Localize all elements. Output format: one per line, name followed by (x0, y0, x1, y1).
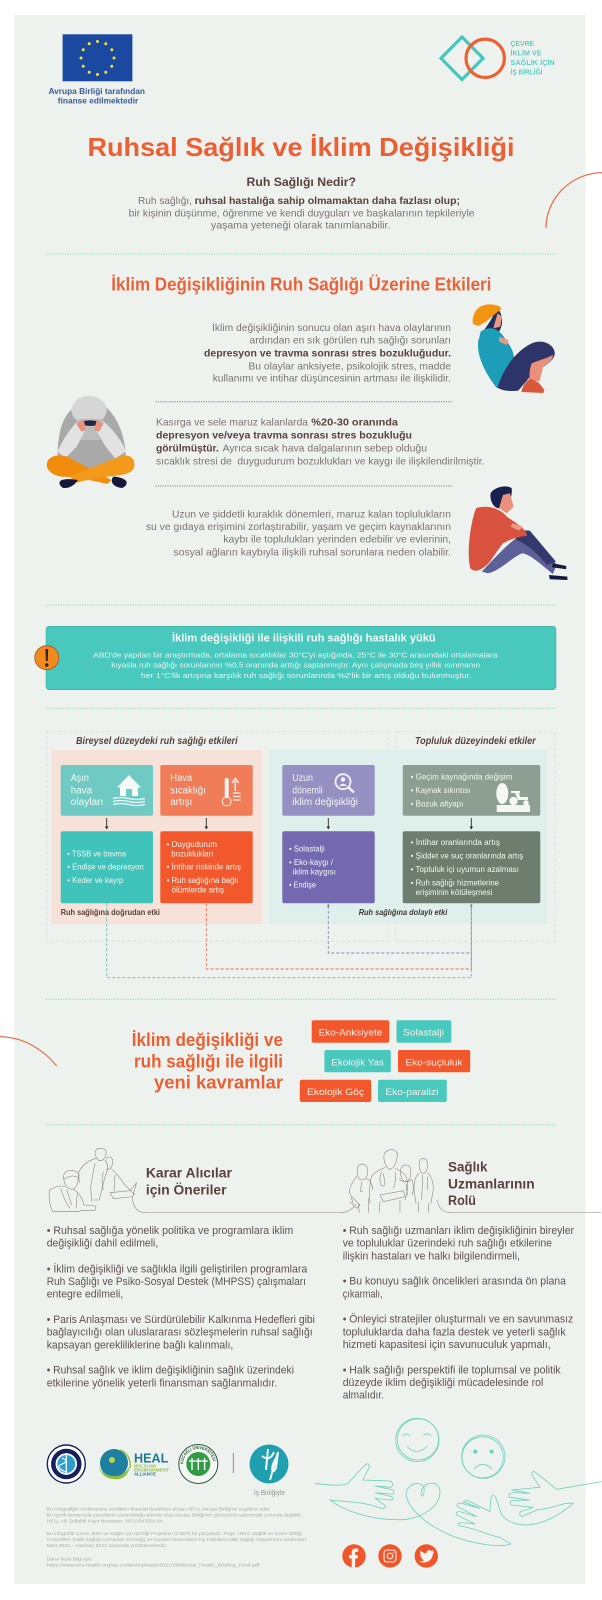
box: rising temperature: Hava (170, 773, 193, 784)
arc: top right decoration (546, 173, 602, 228)
logo: European Union flag with caption: finanse edilmektedir (58, 96, 139, 106)
text block: footer notes: HASUDER (Halk Sağlığı Uzmanları Derneği) ve Kocaeli Üniversitesi Tıp Fakültesi Halk Sağlığı Departmanı tarafından (47, 1536, 306, 1542)
icon: thermometer (222, 778, 241, 806)
text block: recommendations for decision makers: • Ruhsal sağlığa yönelik politika ve programlara iklim (47, 1225, 293, 1237)
icon: flooded house (113, 775, 145, 806)
text block: extreme weather: İklim değişikliğinin sonucu olan aşırı hava olaylarının (212, 321, 451, 334)
text block: extreme weather: depresyon ve travma sonrası stres bozukluğudur. (204, 347, 451, 359)
right hand line (502, 1471, 602, 1525)
heading: new concepts (132, 1030, 283, 1093)
text block: extreme weather: Bu olaylar anksiyete, psikolojik stres, madde (248, 360, 451, 372)
box: community outcomes: • Ruh sağlığı hizmetlerine (411, 878, 499, 887)
heading: new concepts: İklim değişikliği ve (132, 1030, 283, 1050)
text block: role of health professionals: • Bu konuyu sağlık öncelikleri arasında ön plana (343, 1276, 566, 1288)
arrows: dashed connectors (107, 903, 473, 978)
arc: left decoration (0, 1037, 57, 1066)
box: long-term outcomes: iklim kaygısı (293, 867, 336, 876)
box: long-term outcomes: • Endişe (289, 881, 316, 890)
callout: disease burden: İklim değişikliği ile ilişkili ruh sağlığı hastalık yükü (172, 632, 436, 645)
text block: footer notes: Bu infografiğin üretilmesine verdikleri finansal destekten dolayı HEAL Avrupa Birliği'ne teşekkür eder. (47, 1506, 271, 1511)
text block: droughts: sosyal ağların kaybıyla ilişkili ruhsal sorunlara neden olabilir. (174, 546, 451, 558)
heading: decision makers (146, 1165, 233, 1198)
heading: new concepts: yeni kavramlar (154, 1073, 283, 1093)
chart: health effects flow diagram: Ruh sağlığına dolaylı etki (359, 908, 448, 917)
callout: disease burden: her 1°C'lik artışına karşılık ruh sağlığı sorunlarında %2'lik bir artış olduğu bulunmuştur. (141, 671, 471, 680)
title: Ruhsal Sağlık ve İklim Değişikliği (88, 132, 514, 162)
box: community drivers: • Bozuk altyapı (411, 799, 463, 808)
text block: recommendations for decision makers: kapsayan gerekliliklerine bağlı kalınmalı, (47, 1339, 233, 1351)
logo: European Union flag with caption (48, 34, 145, 105)
box: community outcomes: • Şiddet ve suç oranlarında artış (411, 852, 523, 861)
heading: decision makers: Karar Alıcılar (146, 1165, 233, 1180)
logo: Çevre İklim ve Sağlık için İş Birliği: İKLİM VE (510, 48, 542, 57)
logo: Çevre İklim ve Sağlık için İş Birliği: ÇEVRE (510, 39, 534, 48)
logo: teal medical emblem (250, 1444, 288, 1497)
icons: social media (342, 1544, 438, 1568)
box: long-term outcomes: • Eko-kaygı / (289, 858, 334, 867)
text block: role of health professionals (343, 1225, 574, 1402)
box: extreme weather outcomes: • Keder ve kayıp (67, 876, 124, 885)
text block: footer notes (47, 1506, 306, 1568)
box: long-term climate change (282, 765, 375, 816)
frame line under headings (145, 1200, 601, 1213)
heading: effects on mental health: İklim Değişikliğinin Ruh Sağlığı Üzerine Etkileri (111, 275, 491, 295)
logo: Halk Sağlığı Uzmanları Derneği (47, 1445, 85, 1483)
text block: Ruh Sağlığı Nedir (129, 175, 475, 232)
callout: disease burden (35, 626, 556, 690)
text block: recommendations for decision makers: entegre edilmeli, (47, 1289, 123, 1301)
text block: hurricanes and floods: depresyon ve/veya travma sonrası stres bozukluğu (156, 430, 412, 442)
chart: health effects flow diagram: Ruh sağlığına doğrudan etki (61, 908, 160, 917)
box: extreme weather: hava (71, 785, 93, 796)
text block: extreme weather: ardından en sık görülen ruh sağlığı sorunları (250, 335, 451, 347)
text block: droughts: kaybı ile toplulukları yerinden edebilir ve evlerinin, (223, 534, 451, 546)
box: community outcomes (403, 831, 540, 903)
box: extreme weather (61, 765, 153, 816)
illustration: health professionals line drawing (349, 1150, 433, 1213)
box: rising temperature: artışı (170, 797, 192, 808)
arrows: downward links (105, 818, 473, 830)
icon: sitting person in red hoodie (469, 486, 567, 580)
text block: hurricanes and floods: %20-30 oranında (311, 417, 398, 429)
heading: health professionals: Rolü (448, 1193, 476, 1208)
box: rising temperature (160, 765, 253, 816)
text block: recommendations for decision makers: • Ruhsal sağlık ve iklim değişikliğinin sağlık üzerindeki (47, 1365, 294, 1377)
text block: role of health professionals: • Ruh sağlığı uzmanları iklim değişikliğinin bireyler (343, 1225, 574, 1237)
logo: European Union flag with caption: Avrupa Birliği tarafından (48, 86, 145, 96)
logo: HEAL: ALLIANCE (134, 1472, 156, 1476)
heading: health professionals: Sağlık (448, 1159, 488, 1174)
text block: recommendations for decision makers (47, 1225, 315, 1389)
box: rising temperature: sıcaklığı (170, 785, 206, 796)
tags: new concepts: Ekolojik Göç (307, 1087, 364, 1098)
text block: footer notes: HEAL AB Şeffaflık Kayıt Numarası: 00723343501-64. (47, 1518, 164, 1523)
text block: Ruh Sağlığı Nedir: Ruh Sağlığı Nedir? (246, 175, 356, 189)
text block: Ruh Sağlığı Nedir: ruhsal hastalığa sahip olmamaktan daha fazlası olup; (195, 195, 460, 207)
text block: hurricanes and floods: Ayrıca sıcak hava dalgalarının sebep olduğu (223, 442, 427, 454)
illustration: hands, heart and faces (315, 1418, 602, 1546)
text block: Ruh Sağlığı Nedir: yaşama yeteneği olarak tanımlanabilir. (211, 220, 390, 232)
text block: recommendations for decision makers: • Paris Anlaşması ve Sürdürülebilir Kalkınma Hedefleri gibi (47, 1314, 315, 1326)
heading: new concepts: ruh sağlığı ile ilgili (134, 1051, 283, 1071)
box: extreme weather: Aşırı (71, 773, 89, 784)
text block: hurricanes and floods: sıcaklık stresi de duygudurum bozuklukları ve kaygı ile ilişkilendirilmiştir. (156, 455, 484, 467)
tags: new concepts (300, 1020, 470, 1102)
text block: recommendations for decision makers: etkilerine yönelik yeterli finansman sağlanmalıdır. (47, 1377, 277, 1389)
box: extreme weather outcomes (61, 831, 153, 903)
box: long-term climate change: Uzun (292, 773, 313, 784)
icon: sad face (462, 1435, 505, 1478)
icon: happy face (396, 1418, 439, 1462)
text block: droughts: Uzun ve şiddetli kuraklık dönemleri, maruz kalan toplulukların (172, 508, 451, 520)
box: extreme weather: olayları (71, 797, 103, 808)
box: community drivers (403, 765, 540, 816)
icon: tree and tractor (496, 783, 530, 812)
logo: HEAL (98, 1449, 169, 1479)
box: long-term climate change: dönemli (292, 785, 323, 796)
text block: footer notes: Bu içerik tamamıyla yazarların sorumluluğu altında olup Avrupa Birliği'nin görüşlerini yansıtmak zorunda değildir. (47, 1512, 302, 1517)
box: community drivers: • Geçim kaynağında değişim (411, 772, 512, 781)
icon: person with hood holding head (47, 396, 134, 488)
text block: role of health professionals: hizmeti kapasitesi için savunuculuk yapmalı, (343, 1339, 551, 1351)
heading: health professionals (448, 1159, 535, 1208)
box: temperature outcomes: ölümlerde artış (172, 886, 224, 895)
logo: Kocaeli Üniversitesi: KOCAELİ ÜNİVERSİTESİ (180, 1445, 217, 1464)
icon: instagram (378, 1544, 402, 1568)
text block: hurricanes and floods: Kasırga ve sele maruz kalanlarda (156, 417, 308, 429)
text block: role of health professionals: ve topluluklar üzerindeki ruh sağlığı etkilerine (343, 1238, 552, 1250)
logo: HEAL: HEALTH AND (134, 1464, 157, 1469)
box: temperature outcomes: • Ruh sağlığına bağlı (167, 876, 238, 885)
text block: role of health professionals: almalıdır. (343, 1390, 384, 1402)
box: long-term outcomes: • Solastalji (289, 844, 325, 853)
box: community outcomes: • İntihar oranlarında artış (411, 838, 500, 847)
icon: magnifier with person (336, 774, 354, 792)
box: temperature outcomes: • İntihar riskinde artış (167, 863, 241, 872)
text block: role of health professionals: düzeyde iklim değişikliği mücadelesinde rol (343, 1377, 543, 1389)
logo: teal medical emblem: İş Birliğiyle (254, 1488, 285, 1497)
box: extreme weather outcomes: • Endişe ve depresyon (67, 863, 144, 872)
illustration: decision makers line drawing (49, 1148, 145, 1213)
text block: role of health professionals: ilişkin hastaları ve halkı bilgilendirmeli, (343, 1250, 520, 1262)
icon: facebook (342, 1544, 366, 1568)
text block: footer notes: Mart 2021 – Haziran 2023 arasında yürütülmektedir. (47, 1543, 167, 1548)
text block: Ruh Sağlığı Nedir: bir kişinin düşünme, öğrenme ve kendi duyguları ve başkalarının tepkileriyle (129, 208, 475, 220)
tags: new concepts: Eko-paralizi (385, 1087, 438, 1098)
box: long-term outcomes (282, 831, 375, 903)
logo: HEAL: ENVIRONMENT (134, 1468, 169, 1472)
text block: recommendations for decision makers: bağlayıcılığı olan uluslararası sözleşmelerin ruhsal sağlığı (47, 1327, 313, 1339)
chart: health effects flow diagram (47, 732, 555, 978)
heading: decision makers: için Öneriler (146, 1183, 227, 1198)
box: community drivers: • Kaynak sıkıntısı (411, 786, 470, 795)
text block: droughts (146, 508, 451, 558)
tags: new concepts: Eko-suçluluk (405, 1057, 463, 1068)
text block: recommendations for decision makers: • İklim değişikliği ve sağlıkla ilgili geliştirilen programlara (47, 1262, 307, 1275)
text block: role of health professionals: • Önleyici stratejiler oluşturmalı ve en savunmasız (343, 1314, 573, 1326)
logo: Çevre İklim ve Sağlık için İş Birliği: SAĞLIK İÇİN (510, 58, 555, 67)
text block: extreme weather (204, 321, 451, 385)
text block: hurricanes and floods: görülmüştür. (156, 442, 219, 454)
icon: twitter (415, 1544, 438, 1568)
box: temperature outcomes: • Duygudurum (167, 840, 217, 849)
box: temperature outcomes: bozuklukları (171, 849, 213, 858)
chart: health effects flow diagram: Topluluk düzeyindeki etkiler (415, 736, 537, 747)
text block: Ruh Sağlığı Nedir: Ruh sağlığı, (138, 195, 192, 207)
text block: hurricanes and floods (156, 417, 484, 467)
text block: role of health professionals: topluluklarda daha fazla destek ve yeterli sağlık (343, 1326, 566, 1338)
box: community outcomes: • Topluluk içi uyumun azalması (411, 865, 519, 874)
box: community outcomes: erişiminin kötüleşmesi (416, 888, 493, 897)
callout: disease burden: ABD'de yapılan bir araştırmada, ortalama sıcaklıklar 30°C'yi aştığında, 25°C ile 30°C arasındaki ortalamalara (93, 650, 498, 659)
text block: role of health professionals: • Halk sağlığı perspektifi ile toplumsal ve politik (343, 1364, 561, 1376)
text block: footer notes: Daha fazla bilgi için: (47, 1557, 93, 1562)
text block: recommendations for decision makers: değişikliği dahil edilmeli, (47, 1238, 158, 1250)
text block: footer notes: Bu infografik Çevre, İklim ve Sağlık için İşbirliği Projesinin (CİSİP) bir parçasıdır. Proje, HEAL-Sağlık ve Çevre Birliği, (47, 1530, 303, 1536)
text block: recommendations for decision makers: Ruh Sağlığı ve Psiko-Sosyal Destek (MHPSS) çalışmaları (47, 1276, 306, 1288)
box: extreme weather outcomes: • TSSB ve travma (67, 849, 127, 858)
logo: Kocaeli Üniversitesi (178, 1444, 218, 1484)
tags: new concepts: Eko-Anksiyete (319, 1028, 382, 1039)
icon: warning (35, 646, 59, 670)
icon: sitting woman with orange hat (473, 304, 555, 393)
heading: health professionals: Uzmanlarının (448, 1176, 535, 1191)
text block: extreme weather: kullanımı ve intihar düşüncesinin artması ile ilişkilidir. (213, 373, 451, 385)
box: temperature outcomes (160, 831, 253, 903)
tags: new concepts: Ekolojik Yas (331, 1057, 384, 1068)
logo: Çevre İklim ve Sağlık için İş Birliği (441, 37, 555, 80)
text block: footer notes: https://www.env-health.org/wp-content/uploads/2021/06/Mental_Health_Briefing_Final.pdf (47, 1563, 260, 1568)
logo: Çevre İklim ve Sağlık için İş Birliği: İŞ BİRLİĞİ (510, 67, 542, 76)
logo: HEAL: HEAL (134, 1451, 168, 1466)
tags: new concepts: Solastalji (403, 1028, 444, 1039)
text block: role of health professionals: çıkarmalı, (343, 1288, 383, 1300)
left hand and heart line (315, 1464, 511, 1546)
box: long-term climate change: iklim değişikliği (292, 797, 358, 808)
text block: droughts: su ve gıdaya erişimini zorlaştırabilir, yaşam ve geçim kaynaklarının (146, 521, 451, 533)
callout: disease burden: kıyasla ruh sağlığı sorunlarının %0,5 oranında arttığı saptanmıştır. Aynı çalışmada beş yıllık ısınmanın (111, 661, 480, 670)
chart: health effects flow diagram: Bireysel düzeydeki ruh sağlığı etkileri (76, 736, 238, 747)
